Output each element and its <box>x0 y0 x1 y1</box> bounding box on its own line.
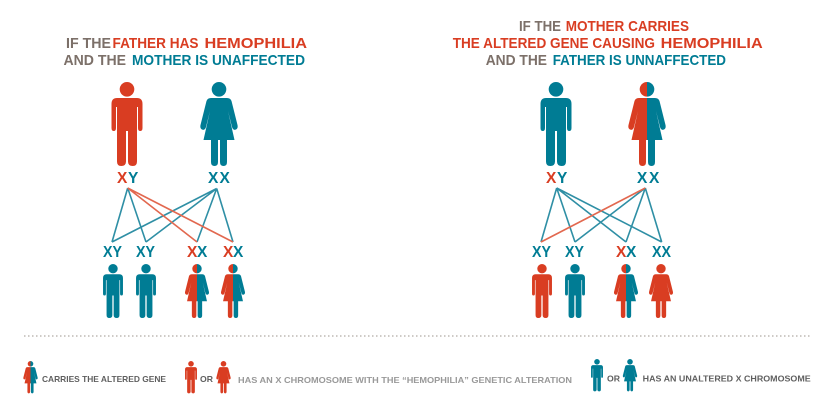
legend: altered X chromosome: HAS AN X CHROMOSOME WITH THE “HEMOPHILIA” GENETIC ALTERATION <box>238 375 572 385</box>
father chromosomes XY <box>117 170 139 187</box>
legend: or: OR <box>200 374 213 384</box>
icon: mother, teal <box>200 82 238 166</box>
child 3: XX carrier daughter: X <box>187 244 198 261</box>
legend: unaltered X chromosome: HAS AN UNALTERED X CHROMOSOME <box>643 374 811 384</box>
mother chromosomes XX <box>208 170 230 187</box>
heading: mother carries altered gene: THE ALTERED GENE CAUSING <box>453 35 655 52</box>
child 3: XX carrier daughter: X <box>616 244 627 261</box>
child 3: XX carrier daughter <box>185 244 209 318</box>
father chromosomes XY: Y <box>128 170 139 187</box>
legend: carries the altered gene: CARRIES THE ALTERED GENE <box>42 374 166 384</box>
child 4: XX carrier daughter <box>221 244 245 318</box>
father chromosomes XY: Y <box>557 170 568 187</box>
child 1: XY unaffected son: XY <box>103 244 123 261</box>
heading: mother carries altered gene <box>453 18 763 69</box>
mother chromosomes XX: X <box>649 170 660 187</box>
heading: mother carries altered gene: HEMOPHILIA <box>661 35 763 52</box>
child 2: XY unaffected son <box>565 244 585 318</box>
father chromosomes XY: X <box>546 170 557 187</box>
child 2: XY unaffected son <box>136 244 156 318</box>
legend: red woman icon <box>216 361 231 393</box>
father chromosomes XY: X <box>117 170 128 187</box>
legend: teal woman icon <box>623 359 637 391</box>
panel: mother carries altered gene <box>453 18 763 318</box>
heading: mother carries altered gene: AND THE <box>486 52 547 69</box>
heading: mother carries altered gene: IF THE <box>519 18 561 35</box>
heading: father has hemophilia: AND THE <box>64 52 126 69</box>
legend: teal man icon <box>591 359 603 391</box>
father chromosomes XY <box>546 170 568 187</box>
mother chromosomes XX: X <box>637 170 648 187</box>
mother chromosomes XX <box>637 170 660 187</box>
mother chromosomes XX: X <box>208 170 219 187</box>
child 2: XY unaffected son: XY <box>565 244 585 261</box>
child 1: XY unaffected son <box>103 244 123 318</box>
child 3: XX carrier daughter <box>614 244 638 318</box>
icon: mother, half red half teal <box>628 82 666 166</box>
child 4: XX affected daughter: XX <box>652 244 672 261</box>
inheritance lines <box>541 188 662 242</box>
child 3: XX carrier daughter: X <box>197 244 208 261</box>
child 4: XX carrier daughter: X <box>223 244 234 261</box>
heading: father has hemophilia: MOTHER IS UNAFFECTED <box>132 52 305 69</box>
child 2: XY unaffected son: XY <box>136 244 156 261</box>
child 4: XX affected daughter <box>649 244 673 318</box>
legend: carrier icon <box>23 361 38 393</box>
child 4: XX carrier daughter: X <box>233 244 244 261</box>
child 1: XY affected son: XY <box>532 244 552 261</box>
legend: or: OR <box>607 374 620 384</box>
legend <box>23 359 811 393</box>
icon: father, red <box>112 82 142 166</box>
legend: red man icon <box>185 361 197 393</box>
heading: father has hemophilia: HEMOPHILIA <box>204 35 307 52</box>
heading: father has hemophilia: IF THE <box>66 35 111 52</box>
child 1: XY affected son <box>532 244 552 318</box>
panel: father has hemophilia <box>64 35 307 318</box>
child 3: XX carrier daughter: X <box>626 244 637 261</box>
inheritance lines <box>112 188 233 242</box>
heading: father has hemophilia: FATHER HAS <box>112 35 198 52</box>
icon: father, teal <box>540 82 572 166</box>
mother chromosomes XX: X <box>220 170 230 187</box>
heading: mother carries altered gene: FATHER IS UNNAFFECTED <box>553 52 726 69</box>
heading: mother carries altered gene: MOTHER CARRIES <box>566 18 689 35</box>
heading: father has hemophilia <box>64 35 307 69</box>
